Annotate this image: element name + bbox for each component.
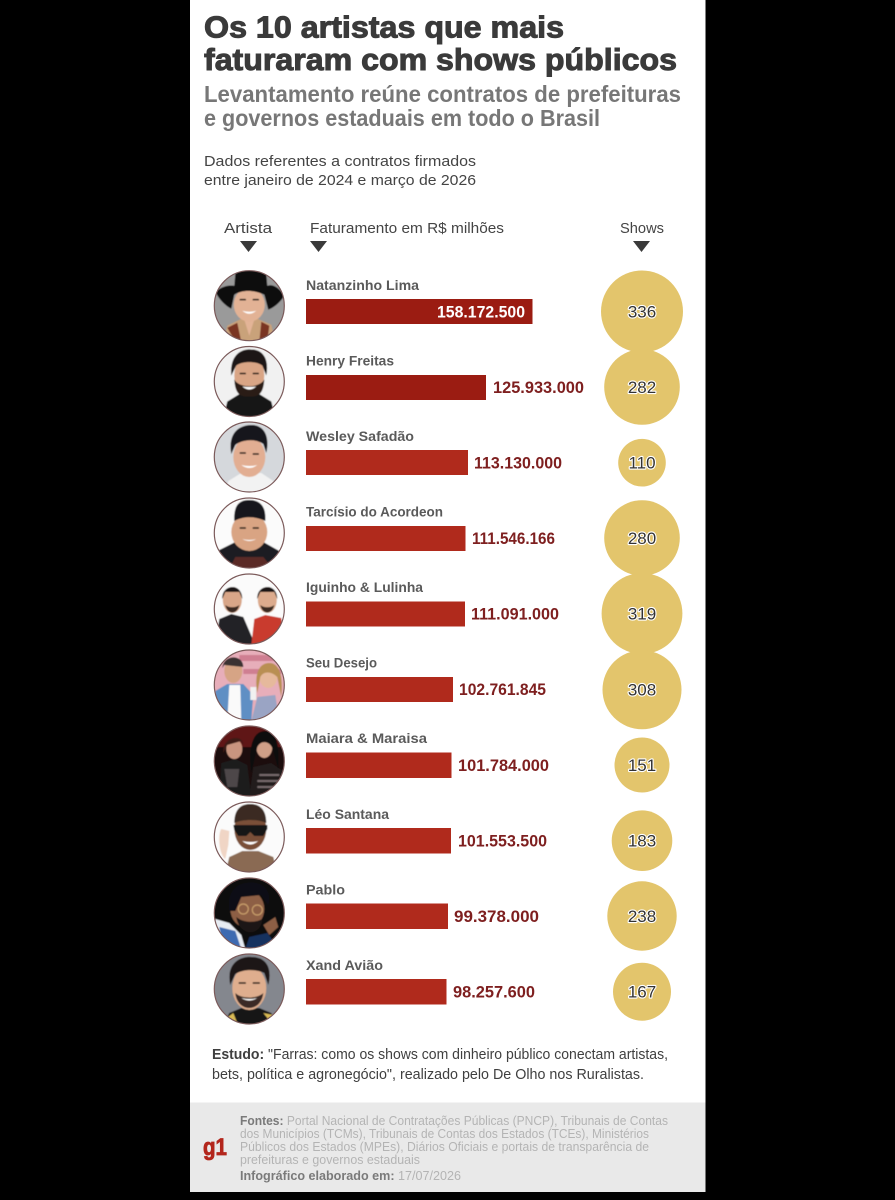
column header: shows: Shows <box>620 220 664 237</box>
study note <box>212 1047 668 1083</box>
row: Pablo: 99.378.000 <box>454 908 539 926</box>
sources text: Públicos dos Estados (MPEs), Diários Oficiais e portais de transparência de <box>240 1140 649 1154</box>
panel: white background <box>190 0 706 1192</box>
icon: portrait Maiara & Maraisa <box>213 725 285 797</box>
icon: portrait Léo Santana <box>213 801 285 873</box>
row: Seu Desejo: Seu Desejo <box>306 656 377 670</box>
bar chart: faturamento <box>306 278 584 1004</box>
icon: portrait Xand Avião <box>213 953 285 1025</box>
row: Léo Santana: Léo Santana <box>306 807 389 822</box>
sources text: dos Municípios (TCMs), Tribunais de Contas dos Estados (TCEs), Ministérios <box>240 1127 649 1141</box>
bubbles: number of shows: 167 <box>628 983 656 1002</box>
row: Wesley Safadão: Wesley Safadão <box>306 429 414 444</box>
row: Seu Desejo: 102.761.845 <box>459 681 546 699</box>
data period note: entre janeiro de 2024 e março de 2026 <box>204 172 476 189</box>
icon: portrait Wesley Safadão <box>213 421 285 493</box>
bubbles: number of shows: 110 <box>628 454 656 473</box>
row: Xand Avião <box>306 958 535 1004</box>
data period note: Dados referentes a contratos firmados <box>204 153 476 170</box>
sources text <box>240 1114 668 1183</box>
subtitle: e governos estaduais em todo o Brasil <box>204 105 600 131</box>
bubbles: number of shows: 282 <box>628 378 656 397</box>
row: Natanzinho Lima: 158.172.500 <box>437 304 525 322</box>
row: Maiara & Maraisa: 101.784.000 <box>458 757 549 775</box>
icon: portrait Pablo <box>213 877 285 949</box>
row: Xand Avião: 98.257.600 <box>453 984 535 1002</box>
bubbles: number of shows: 151 <box>628 756 656 775</box>
title: faturaram com shows públicos <box>204 42 677 77</box>
bubbles: number of shows: 183 <box>628 832 656 851</box>
title: Os 10 artistas que mais <box>204 10 564 44</box>
row: Iguinho & Lulinha: Iguinho & Lulinha <box>306 580 423 595</box>
column header: artista <box>224 220 273 252</box>
row: Léo Santana <box>306 807 547 854</box>
bubbles: number of shows: 308 <box>628 681 656 700</box>
row: Henry Freitas <box>306 354 584 400</box>
sources text: prefeituras e governos estaduais <box>240 1153 420 1167</box>
row: Tarcísio do Acordeon <box>306 504 555 551</box>
row: Iguinho & Lulinha <box>306 580 559 626</box>
data period note <box>204 153 476 189</box>
row: Seu Desejo <box>306 656 546 702</box>
row: Maiara & Maraisa: Maiara & Maraisa <box>306 731 428 746</box>
subtitle <box>204 81 681 131</box>
row: Maiara & Maraisa <box>306 731 549 778</box>
footer band <box>190 1102 706 1192</box>
column header: faturamento: Faturamento em R$ milhões <box>310 220 504 237</box>
subtitle: Levantamento reúne contratos de prefeituras <box>204 81 681 107</box>
title <box>204 10 677 77</box>
row: Pablo: Pablo <box>306 882 345 898</box>
sources text: Fontes: Portal Nacional de Contratações Públicas (PNCP), Tribunais de Contas <box>240 1114 668 1128</box>
column header: artista: Artista <box>224 220 273 237</box>
bubbles: number of shows: 336 <box>628 302 656 322</box>
row: Natanzinho Lima <box>306 278 532 324</box>
row: Henry Freitas: 125.933.000 <box>493 379 584 397</box>
row: Wesley Safadão: 113.130.000 <box>474 454 562 472</box>
row: Henry Freitas: Henry Freitas <box>306 354 394 368</box>
bubbles: number of shows: 319 <box>628 604 656 624</box>
portraits column <box>213 270 285 1025</box>
icon: portrait Natanzinho Lima <box>213 270 285 342</box>
study note: Estudo: "Farras: como os shows com dinheiro público conectam artistas, <box>212 1047 668 1063</box>
bubbles: number of shows <box>601 270 683 1021</box>
icon: portrait Tarcísio do Acordeon <box>213 497 285 569</box>
bubbles: number of shows: 280 <box>628 529 656 548</box>
study note: bets, política e agronegócio", realizado pelo De Olho nos Ruralistas. <box>212 1067 644 1083</box>
row: Xand Avião: Xand Avião <box>306 958 383 973</box>
row: Natanzinho Lima: Natanzinho Lima <box>306 278 420 293</box>
row: Wesley Safadão <box>306 429 562 475</box>
infographic <box>190 0 706 1192</box>
row: Léo Santana: 101.553.500 <box>458 832 547 850</box>
icon: portrait Iguinho & Lulinha <box>213 573 285 645</box>
icon: portrait Seu Desejo <box>213 649 285 721</box>
column header: faturamento <box>310 220 504 252</box>
icon: portrait Henry Freitas <box>213 346 285 418</box>
row: Tarcísio do Acordeon: 111.546.166 <box>472 530 555 548</box>
row: Iguinho & Lulinha: 111.091.000 <box>471 606 559 624</box>
row: Tarcísio do Acordeon: Tarcísio do Acordeon <box>306 504 443 520</box>
column header: shows <box>620 220 664 252</box>
bubbles: number of shows: 238 <box>628 907 656 926</box>
sources text: Infográfico elaborado em: 17/07/2026 <box>240 1168 461 1183</box>
row: Pablo <box>306 882 539 929</box>
logo: g1: g1 <box>203 1134 227 1161</box>
